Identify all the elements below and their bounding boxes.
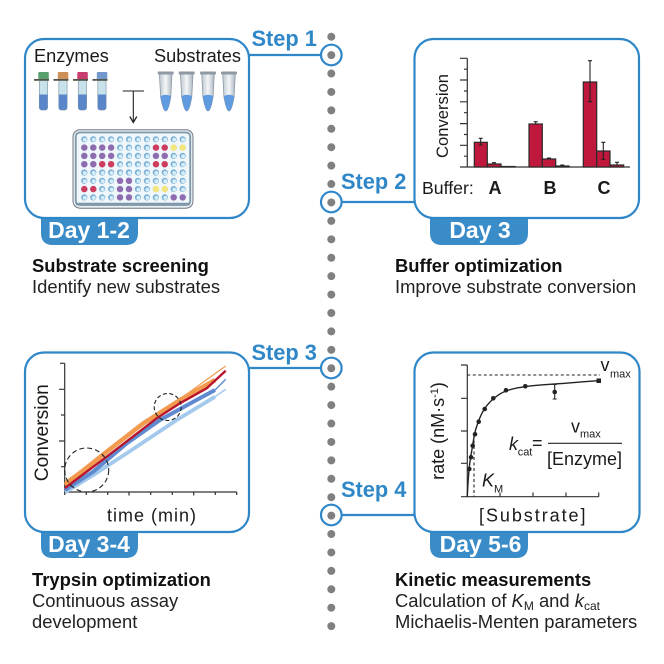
axis label: time: time (min) [107,506,196,526]
category labels: buffers [422,178,610,198]
arrow: combine into plate [123,91,144,122]
day tab: Day 3 [430,210,528,245]
text: trypsin optimization: development [32,611,137,632]
equation: kcat: v [571,416,580,436]
label: KM: K [482,471,495,491]
equation: kcat: = [532,433,543,453]
step 4 marker [321,477,414,525]
text: kinetic measurements: k [575,590,585,611]
chart: Michaelis-Menten curve [428,355,631,526]
line chart: continuous assay [32,363,237,526]
bar chart: conversion by buffer [422,58,630,198]
step 1 marker: Step 1 [252,26,317,51]
equation: kcat: cat [518,447,532,459]
axis label: rate: ) [428,382,448,388]
category labels: buffers: Buffer: [422,178,474,198]
panel frame 2 [414,39,639,218]
axis label: Conversion: Conversion [433,74,452,158]
step 3 marker [249,340,342,378]
panel: substrate screening [25,39,249,245]
step 4 marker: Step 4 [341,477,406,502]
axis label: rate: -1 [429,388,441,398]
step 2 marker: Step 2 [341,169,406,194]
text: buffer optimization: Buffer optimization [395,255,563,276]
text: buffer optimization: Improve substrate conversion [395,276,636,297]
equation: kcat: [Enzyme] [547,449,622,469]
text: kinetic measurements: M [524,599,534,613]
dotted timeline [327,37,335,627]
text: kinetic measurements [395,569,637,632]
step 1 marker [249,26,342,65]
text: kinetic measurements: and [534,590,575,611]
equation: kcat [509,416,622,469]
text: kinetic measurements: cat [584,599,601,613]
day tab: Day 5-6 [430,524,528,558]
label: Substrates: Substrates [154,46,241,66]
day tab: Day 1-2 [41,210,138,245]
label: vmax: max [610,368,631,380]
label: KM: M [494,483,503,495]
axis label: rate: rate (nM·s [428,398,448,480]
panel: buffer optimization [414,39,639,245]
panel: trypsin optimization [25,352,249,558]
icon: 96-well plate [73,130,193,208]
panel: kinetic measurements [414,352,640,558]
icon: substrate tubes [158,72,237,111]
equation: kcat: k [509,434,519,454]
icon: enzyme tubes [34,72,108,110]
text: trypsin optimization: Continuous assay [32,590,179,611]
equation: kcat: max [580,429,601,441]
day tab: Day 3-4 [41,524,138,558]
label: KM [482,471,503,495]
text: kinetic measurements: Kinetic measurements [395,569,591,590]
label: vmax: v [600,355,610,375]
day tab: Day 5-6: Day 5-6 [440,531,521,557]
category labels: buffers: C [598,178,610,198]
step 2 marker [321,169,414,212]
step 3 marker: Step 3 [252,340,317,365]
category labels: buffers: B [544,178,556,198]
axis label: Conversion: Conversion [32,384,53,481]
text: trypsin optimization: Trypsin optimization [32,569,211,590]
label: Enzymes: Enzymes [34,46,109,66]
text: kinetic measurements: Calculation of K [395,590,524,611]
axis label: Substrate: [Substrate] [479,506,586,526]
text: substrate screening: Identify new substrates [32,276,220,297]
category labels: buffers: A [488,178,502,198]
text: kinetic measurements: Michaelis-Menten parameters [395,611,637,632]
panel frame 3 [25,352,249,532]
day tab: Day 1-2: Day 1-2 [48,217,130,243]
day tab: Day 3-4: Day 3-4 [48,531,130,557]
text: substrate screening [32,255,220,297]
day tab: Day 3: Day 3 [449,217,511,243]
panel frame 4 [414,352,640,532]
panel frame 1 [25,39,249,218]
text: substrate screening: Substrate screening [32,255,209,276]
label: vmax [600,355,631,380]
text: buffer optimization [395,255,636,297]
text: trypsin optimization [32,569,211,632]
